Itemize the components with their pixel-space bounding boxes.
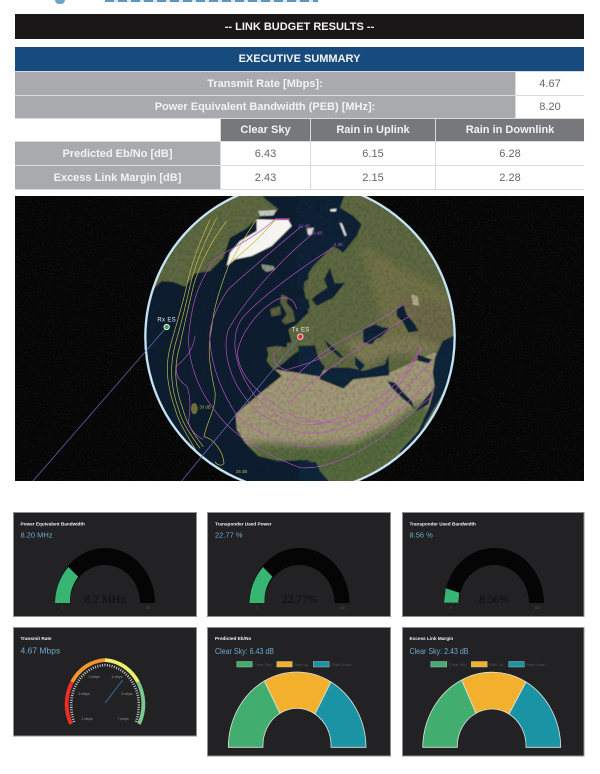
panel: transponder used power gauge: 100 <box>339 606 345 610</box>
value: margin rain uplink: 2.15 <box>362 172 384 184</box>
legend <box>237 662 352 667</box>
legend: Rain Up <box>294 662 309 667</box>
panel: transponder used power gauge: 0 <box>256 606 258 610</box>
row: transmit rate value: 4.67 <box>539 78 561 90</box>
column header: rain in downlink: Rain in Downlink <box>466 124 554 136</box>
beam lines <box>33 327 300 481</box>
marker: Tx ES <box>292 327 310 339</box>
column header: rain in uplink: Rain in Uplink <box>336 124 410 136</box>
panel: transponder used bandwidth gauge <box>402 512 584 616</box>
panel: predicted Eb/No doughnut: Clear Sky: 6.43 dB <box>215 646 274 656</box>
panel: excess link margin doughnut: Excess Link Margin <box>410 636 453 641</box>
olive contour blob <box>191 403 198 414</box>
column header: rain in uplink <box>311 119 435 141</box>
heading: link budget results: -- LINK BUDGET RESULTS -- <box>225 20 374 32</box>
row label: predicted Eb/No: Predicted Eb/No [dB] <box>62 148 172 160</box>
africa and arabia desert <box>234 368 300 459</box>
oceans crop NW <box>138 196 308 343</box>
panel: transmit rate speedometer: Transmit Rate <box>20 636 52 641</box>
row: transmit rate label <box>15 72 515 95</box>
row label: excess link margin <box>15 166 220 189</box>
row: PEB label: Power Equivalent Bandwidth (PEB) [MHz]: <box>155 101 375 113</box>
value: Eb/No rain downlink: 6.28 <box>499 148 521 160</box>
row: PEB value: 8.20 <box>539 101 561 113</box>
value: margin rain downlink <box>436 166 584 189</box>
speedometer colour arc <box>67 660 143 724</box>
panel: transponder used bandwidth gauge: 0 <box>450 606 452 610</box>
marker: Rx ES <box>157 318 176 330</box>
table heading <box>15 47 584 71</box>
speedometer labels: 4 mbps <box>111 675 123 679</box>
doughnut segments <box>228 672 366 747</box>
speedometer labels: 5 mbps <box>121 692 133 696</box>
panel: transponder used bandwidth gauge: 8.56 % <box>410 530 433 540</box>
heading: link budget results <box>15 14 584 39</box>
value: Eb/No rain downlink <box>436 142 584 165</box>
panel: power equivalent bandwidth gauge: 0 <box>61 606 63 610</box>
panel: power equivalent bandwidth gauge: 36 <box>146 606 150 610</box>
panel: transponder used power gauge: 22.77 % <box>215 530 243 540</box>
empty header cell <box>15 119 220 141</box>
value: Eb/No rain uplink <box>311 142 435 165</box>
panel: predicted Eb/No doughnut <box>208 628 390 756</box>
oceans crop NE <box>297 194 418 342</box>
speedometer labels: 2 mbps <box>78 692 90 696</box>
value: margin clear sky: 2.43 <box>255 172 276 184</box>
globe with coverage contours <box>32 196 456 481</box>
marker: Rx ES: Rx ES <box>157 318 176 324</box>
value: margin clear sky <box>221 166 310 189</box>
arctic ice and barents islands <box>307 209 419 306</box>
contour value labels: 12 dB <box>299 223 310 228</box>
speedometer needle <box>105 680 123 703</box>
yellow contours <box>165 218 275 465</box>
land tints <box>343 245 453 368</box>
legend: Rain Down <box>526 662 546 667</box>
panel: predicted Eb/No doughnut: Predicted Eb/No <box>215 636 251 641</box>
panel: power equivalent bandwidth gauge <box>14 512 196 616</box>
contour value labels <box>199 223 343 474</box>
cropped header fragments <box>55 0 318 4</box>
panel: transmit rate speedometer: 4.67 Mbps <box>20 646 60 656</box>
speedometer labels <box>78 675 133 721</box>
british isles, iceland and greenland <box>258 210 295 324</box>
row: PEB label <box>15 96 515 118</box>
contour value labels: 9 dB <box>313 230 322 235</box>
table heading: EXECUTIVE SUMMARY <box>239 53 360 65</box>
speedometer labels: 7 mbps <box>117 717 129 721</box>
panel: transmit rate speedometer <box>14 628 196 736</box>
row: transmit rate value <box>516 72 584 95</box>
legend: Rain Up <box>489 662 504 667</box>
value: margin rain uplink <box>311 166 435 189</box>
oceans crop SW <box>146 342 309 481</box>
panel: satellite coverage globe map <box>15 178 584 495</box>
land base <box>154 196 454 481</box>
row label: predicted Eb/No <box>15 142 220 165</box>
column header: clear sky <box>221 119 310 141</box>
column header: rain in downlink <box>436 119 584 141</box>
panel: transponder used power gauge: 22.77% <box>282 594 318 606</box>
legend <box>431 662 546 667</box>
legend: Clear Sky <box>449 662 466 667</box>
panel: excess link margin doughnut: Clear Sky: 2.43 dB <box>410 646 469 656</box>
panel: excess link margin doughnut <box>402 628 584 756</box>
legend: Clear Sky <box>254 662 271 667</box>
legend: Rain Down <box>332 662 352 667</box>
speedometer labels: 3 mbps <box>88 675 100 679</box>
column header: clear sky: Clear Sky <box>240 124 291 136</box>
panel: transponder used bandwidth gauge: 100 <box>534 606 540 610</box>
sahel vegetation <box>245 402 433 485</box>
panel: transponder used bandwidth gauge: Transponder Used Bandwidth <box>410 522 476 526</box>
land mottling <box>148 196 453 481</box>
contour value labels: 6 dB <box>334 242 343 247</box>
value: Eb/No rain uplink: 6.15 <box>362 148 384 160</box>
greenland ice sheet <box>227 219 292 266</box>
value: margin rain downlink: 2.28 <box>499 172 521 184</box>
doughnut segments <box>423 672 561 747</box>
row: transmit rate label: Transmit Rate [Mbps]: <box>207 78 323 90</box>
panel: power equivalent bandwidth gauge: 8.2 MHz <box>85 594 125 606</box>
row label: excess link margin: Excess Link Margin [dB] <box>54 172 181 184</box>
value: Eb/No clear sky: 6.43 <box>255 148 276 160</box>
speedometer ticks <box>71 665 139 722</box>
row: PEB value <box>516 96 584 118</box>
panel: executive summary table <box>15 47 584 190</box>
panel: power equivalent bandwidth gauge: Power Equivalent Bandwidth <box>20 522 85 526</box>
panel: power equivalent bandwidth gauge: 8.20 MHz <box>20 530 53 540</box>
oceans crop SE <box>298 334 457 483</box>
panel: transponder used power gauge <box>208 512 390 616</box>
contour value labels: 25 dB <box>236 469 247 474</box>
contour value labels: 30 dB <box>199 404 211 409</box>
speedometer labels: 1 mbps <box>81 717 93 721</box>
value: Eb/No clear sky <box>221 142 310 165</box>
magenta contours <box>176 219 433 468</box>
panel: transponder used power gauge: Transponder Used Power <box>215 522 272 526</box>
panel: transponder used bandwidth gauge: 8.56% <box>479 594 509 606</box>
atmosphere ring <box>145 182 455 492</box>
marker: Tx ES: Tx ES <box>292 327 310 333</box>
